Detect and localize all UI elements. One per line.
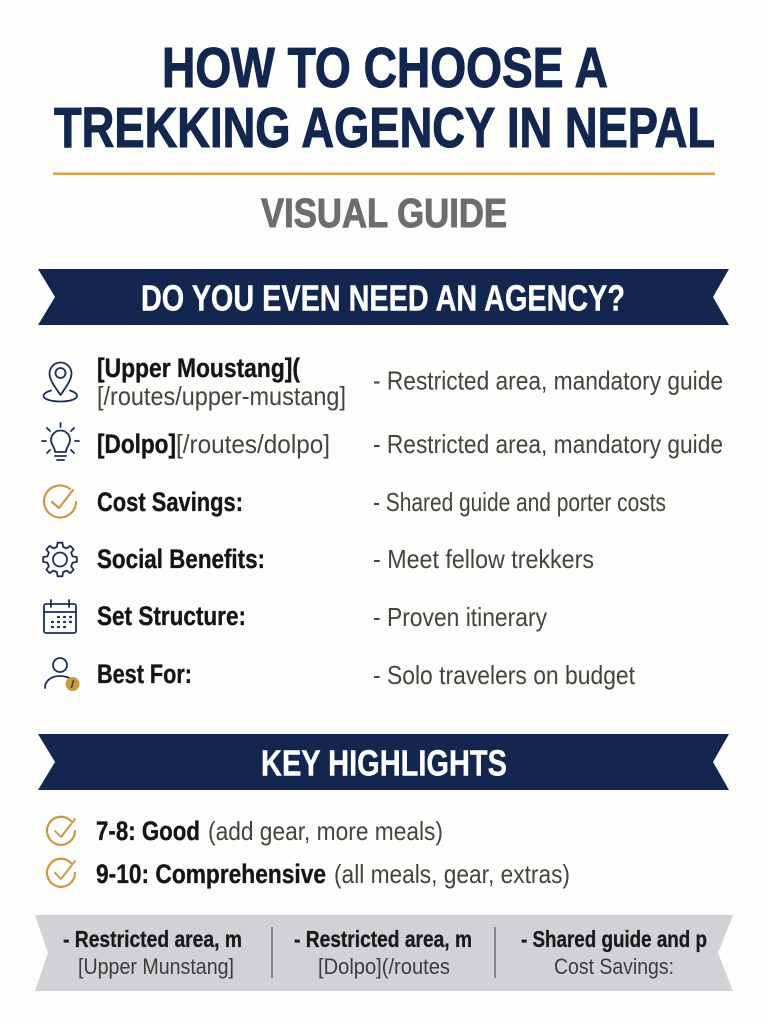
title: HOW TO CHOOSE A xyxy=(162,36,608,100)
panel: summary strip xyxy=(35,915,733,991)
row: Upper Moustang: - Restricted area, mandatory guide xyxy=(373,366,723,396)
row: Social Benefits xyxy=(43,543,594,576)
row: Social Benefits: Social Benefits: xyxy=(97,544,265,574)
highlight: 9-10 comprehensive: (all meals, gear, extras) xyxy=(334,859,570,889)
icon: gold check xyxy=(47,859,75,887)
strip column: dolpo xyxy=(294,926,472,979)
row: Set Structure: - Proven itinerary xyxy=(373,602,547,632)
row: Cost Savings: - Shared guide and porter costs xyxy=(373,487,666,517)
highlight: 9-10 comprehensive: 9-10: Comprehensive xyxy=(96,859,326,889)
row: Upper Moustang xyxy=(44,353,723,411)
strip column: upper mustang xyxy=(63,926,242,979)
icon: gold check circle xyxy=(44,485,76,517)
icon: map pin xyxy=(44,363,77,402)
row: Cost Savings: Cost Savings: xyxy=(97,487,243,517)
panel: highlights list xyxy=(47,816,570,889)
icon: person with badge xyxy=(45,658,80,691)
banner: key highlights xyxy=(38,734,729,790)
row: Best For: Best For: xyxy=(97,659,192,689)
strip column: dolpo: - Restricted area, m xyxy=(294,926,472,952)
banner: do you even need an agency xyxy=(38,269,729,325)
banner: key highlights: KEY HIGHLIGHTS xyxy=(261,742,507,784)
highlight: 7-8 good: 7-8: Good xyxy=(96,816,200,846)
icon: gear xyxy=(43,543,77,576)
banner: do you even need an agency: DO YOU EVEN NEED AN AGENCY? xyxy=(141,278,625,318)
row: Set Structure: Set Structure: xyxy=(97,601,246,631)
row: Set Structure xyxy=(44,600,547,633)
title xyxy=(54,36,715,160)
row: Upper Moustang: [Upper Moustang]( xyxy=(97,353,300,383)
icon: calendar xyxy=(44,600,76,633)
icon: light bulb xyxy=(42,423,79,460)
row: Best For: - Solo travelers on budget xyxy=(373,660,636,690)
highlight: 7-8 good: (add gear, more meals) xyxy=(208,816,443,846)
subtitle: VISUAL GUIDE xyxy=(261,190,507,236)
strip column: cost savings: - Shared guide and p xyxy=(521,926,707,952)
strip column: dolpo: [Dolpo](/routes xyxy=(318,954,450,979)
row: Dolpo: [Dolpo] xyxy=(97,429,176,459)
panel: agency checklist xyxy=(42,353,723,691)
row: Dolpo xyxy=(42,423,723,460)
highlight: 7-8 good xyxy=(47,816,443,846)
highlight: 9-10 comprehensive xyxy=(47,859,570,889)
row: Best For xyxy=(45,658,636,691)
strip column: cost savings xyxy=(521,926,707,979)
strip column: upper mustang: - Restricted area, m xyxy=(63,926,242,952)
row: Upper Moustang: [/routes/upper-mustang] xyxy=(97,381,346,411)
strip column: cost savings: Cost Savings: xyxy=(554,954,674,979)
strip column: upper mustang: [Upper Munstang] xyxy=(78,954,234,979)
row: Cost Savings xyxy=(44,485,666,517)
row: Social Benefits: - Meet fellow trekkers xyxy=(373,544,594,574)
icon: gold check xyxy=(47,817,75,845)
row: Dolpo: - Restricted area, mandatory guide xyxy=(373,429,723,459)
row: Dolpo: [/routes/dolpo] xyxy=(176,429,330,459)
